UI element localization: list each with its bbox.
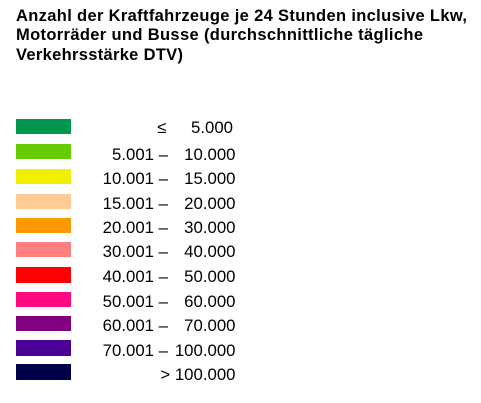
legend row: 20.001 to 30.000: 20.001 – — [103, 218, 169, 237]
title: Verkehrsstärke DTV) — [16, 46, 183, 64]
legend row: up to 5.000 — [16, 118, 233, 137]
legend row: up to 5.000: 5.000 — [191, 118, 233, 137]
legend row: 50.001 to 60.000: 50.001 – — [103, 292, 169, 311]
legend row: 20.001 to 30.000 — [16, 218, 236, 237]
legend row: 5.001 to 10.000: 10.000 — [184, 145, 236, 164]
legend row: 70.001 to 100.000: 70.001 – — [103, 341, 169, 360]
legend row: 15.001 to 20.000 — [16, 194, 236, 213]
legend row: 30.001 to 40.000: 40.000 — [184, 242, 236, 261]
legend row: 30.001 to 40.000 — [16, 242, 236, 261]
legend row: 10.001 to 15.000: 15.000 — [184, 169, 236, 188]
legend row: 50.001 to 60.000 — [16, 292, 236, 311]
legend — [16, 118, 236, 384]
title — [16, 7, 467, 64]
legend row: 70.001 to 100.000 — [16, 340, 236, 360]
legend row: 15.001 to 20.000: 15.001 – — [103, 194, 169, 213]
legend row: 5.001 to 10.000 — [16, 144, 236, 164]
legend row: 10.001 to 15.000: 10.001 – — [103, 169, 169, 188]
legend row: 50.001 to 60.000: 60.000 — [184, 292, 236, 311]
legend row: over 100.000 — [16, 364, 236, 384]
title: Motorräder und Busse (durchschnittliche tägliche — [16, 26, 423, 44]
legend row: 15.001 to 20.000: 20.000 — [184, 194, 236, 213]
legend row: 5.001 to 10.000: 5.001 – — [112, 145, 169, 164]
legend row: 30.001 to 40.000: 30.001 – — [103, 242, 169, 261]
legend row: 40.001 to 50.000: 50.000 — [184, 267, 236, 286]
legend row: 70.001 to 100.000: 100.000 — [175, 341, 236, 360]
legend row: 40.001 to 50.000: 40.001 – — [103, 267, 169, 286]
legend row: up to 5.000: ≤ — [157, 118, 166, 137]
title: Anzahl der Kraftfahrzeuge je 24 Stunden inclusive Lkw, — [16, 7, 467, 25]
legend row: 40.001 to 50.000 — [16, 267, 236, 286]
legend row: 60.001 to 70.000: 60.001 – — [103, 316, 169, 335]
legend row: 10.001 to 15.000 — [16, 169, 236, 188]
legend row: 60.001 to 70.000 — [16, 316, 236, 335]
legend row: 20.001 to 30.000: 30.000 — [184, 218, 236, 237]
legend row: over 100.000: > 100.000 — [160, 365, 236, 384]
legend row: 60.001 to 70.000: 70.000 — [184, 316, 236, 335]
